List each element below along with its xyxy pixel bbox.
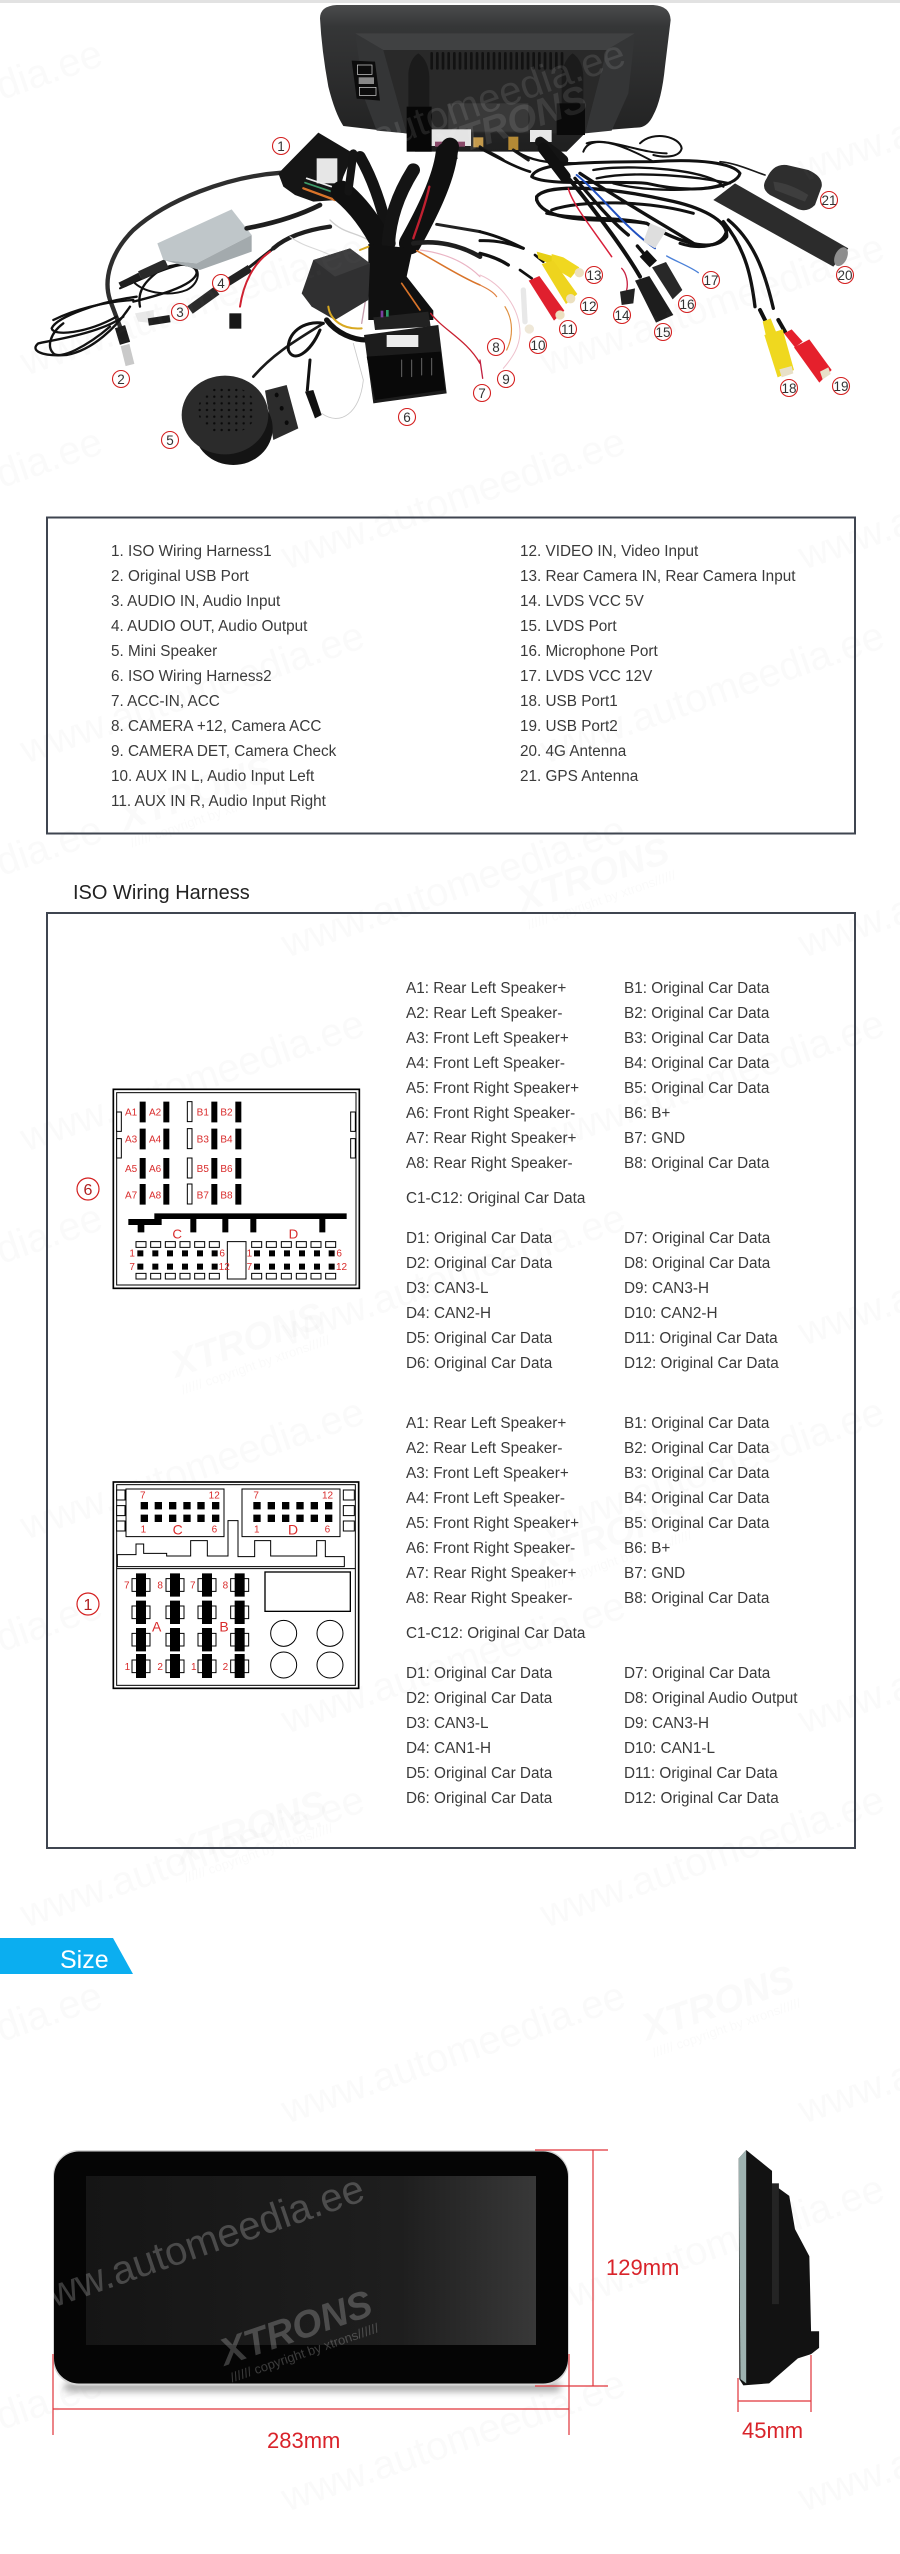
pinout list: harness 6: D9: CAN3-H [624,1280,709,1297]
callout 3: 3 [176,305,184,320]
parts list left column: 7. ACC-IN, ACC [111,693,220,710]
pinout list: harness 1: B1: Original Car Data [624,1415,770,1432]
parts list right column: 15. LVDS Port [520,618,617,635]
side view of head unit [739,2150,819,2385]
pinout list: harness 6: D10: CAN2-H [624,1305,718,1322]
parts list left column: 9. CAMERA DET, Camera Check [111,743,337,760]
watermark overlay on head unit: www.automeedia.ee [275,32,631,191]
connector diagram: harness 1: 1 [125,1662,131,1673]
pinout list: harness 6: B1: Original Car Data [624,980,770,997]
pinout list: harness 1: D8: Original Audio Output [624,1690,798,1707]
connector diagram: harness 1: 7 [190,1580,196,1591]
watermark: automeedia text pattern: www.automeedia.ee [14,1002,370,1161]
callout 9: 9 [502,372,510,387]
callout 19: 19 [833,379,849,394]
pinout list: harness 6: D8: Original Car Data [624,1255,771,1272]
pinout list: harness 6: D4: CAN2-H [406,1305,491,1322]
pinout list: harness 1: B6: B+ [624,1540,670,1557]
connector diagram: harness 6: A4 [149,1135,162,1146]
connector diagram: harness 1: 2 [223,1662,229,1673]
pinout list: harness 6: A7: Rear Right Speaker+ [406,1130,577,1147]
pinout list: harness 1: B2: Original Car Data [624,1440,770,1457]
watermark: automeedia text pattern: www.automeedia.ee [534,1390,890,1549]
interface box [157,205,320,270]
product photo: right side accessories [480,136,851,383]
watermark: XTRONS logos: XTRONS [509,830,675,922]
callout 11: 11 [561,322,575,337]
connector diagram: harness 6: B6 [220,1164,233,1175]
watermark: XTRONS logos: XTRONS [634,1958,800,2050]
pinout list: harness 1: A2: Rear Left Speaker- [406,1440,562,1457]
watermark: automeedia text pattern: www.automeedia.ee [534,226,890,385]
connector diagram: harness 1: 7 [140,1491,146,1502]
product photo: head unit rear [320,5,671,160]
connector diagram: harness 1: 6 [325,1524,331,1535]
pinout list: harness 1: A3: Front Left Speaker+ [406,1465,569,1482]
watermark: automeedia text pattern: www.automeedia.ee [14,1390,370,1549]
harness 2 connector [364,310,447,403]
watermark: XTRONS logos: XTRONS [525,1490,691,1582]
section banner: Size: Size [60,1946,109,1974]
pinout list: harness 1: D6: Original Car Data [406,1790,553,1807]
parts list right column: 16. Microphone Port [520,643,658,660]
watermark: XTRONS logos: XTRONS [112,748,278,840]
connector diagram: harness 1: B [219,1619,229,1635]
dimension: depth 45mm: 45mm [742,2418,803,2443]
heading: ISO Wiring Harness: ISO Wiring Harness [73,882,250,904]
watermark on screen: www.automeedia.ee [14,2167,370,2326]
parts list right column: 20. 4G Antenna [520,743,627,760]
pinout list: harness 6: B7: GND [624,1130,685,1147]
connector diagram: harness 6: A7 [125,1190,138,1201]
pinout list: harness 1: A8: Rear Right Speaker- [406,1590,573,1607]
watermark: automeedia text pattern: www.automeedia.ee [534,1002,890,1161]
connector diagram: harness 6: A5 [125,1164,138,1175]
pinout list: harness 6: D7: Original Car Data [624,1230,771,1247]
connector diagram: harness 1: 1 [191,1662,197,1673]
panel: parts list [47,518,855,834]
connector diagram: harness 6: B5 [197,1164,209,1175]
connector diagram: harness 1: 2 [157,1662,163,1673]
mini speaker [182,376,298,465]
callout 4 [212,274,230,292]
section banner: Size [0,1938,133,1974]
callout 6 badge: 6 [84,1182,93,1199]
connector diagram: harness 6 [113,1089,359,1288]
callout 5: 5 [166,433,174,448]
pinout list: harness 6: A5: Front Right Speaker+ [406,1080,579,1097]
pinout list: harness 6: D1: Original Car Data [406,1230,553,1247]
watermark: automeedia text pattern: www.automeedia.ee [275,1974,631,2133]
callout 17: 17 [703,273,719,288]
watermark on screen: XTRONS [212,2283,378,2375]
display area [86,2176,536,2345]
connector diagram: harness 6: C [172,1226,182,1241]
pinout list: harness 6: D12: Original Car Data [624,1355,779,1372]
pinout list: harness 1: D9: CAN3-H [624,1715,709,1732]
callout 2: 2 [117,372,125,387]
pinout list: harness 1: B7: GND [624,1565,685,1582]
pinout list: harness 1: A5: Front Right Speaker+ [406,1515,579,1532]
pinout list: harness 1: A6: Front Right Speaker- [406,1540,575,1557]
connector diagram: harness 6: A2 [149,1108,162,1119]
RCA leads and plugs [480,232,584,378]
cable loom coil [480,136,740,247]
watermark: XTRONS logos: ////// copyright by xtrons////// [182,1820,335,1885]
pinout list: harness 6: B5: Original Car Data [624,1080,770,1097]
parts list left column: 11. AUX IN R, Audio Input Right [111,793,327,810]
connector diagram: harness 6: D [289,1226,298,1241]
pinout list: harness 6: B4: Original Car Data [624,1055,770,1072]
watermark: automeedia text pattern: www.automeedia.ee [14,614,370,773]
pinout list: harness 6: B2: Original Car Data [624,1005,770,1022]
connector diagram: harness 6: 12 [219,1262,230,1273]
display connectors [432,129,471,146]
connector diagram: harness 1: D [288,1522,298,1538]
connector diagram: harness 1: 7 [253,1491,259,1502]
watermark: automeedia text pattern: www.automeedia.ee [14,1778,370,1937]
watermark: automeedia text pattern: www.automeedia.ee [14,226,370,385]
pinout list: harness 6: C1-C12: Original Car Data [406,1190,586,1207]
connector diagram: harness 6: A1 [125,1108,138,1119]
callout 6 badge [77,1178,99,1200]
wrapped wiring bundle [342,147,480,363]
watermark: automeedia text pattern: www.automeedia.ee [534,1778,890,1937]
parts list left column: 8. CAMERA +12, Camera ACC [111,718,321,735]
parts list left column: 1. ISO Wiring Harness1 [111,543,272,560]
connector diagram: harness 1: 12 [209,1491,220,1502]
connector diagram: harness 6: B1 [197,1108,209,1119]
watermark: XTRONS logos: ////// copyright by xtrons////// [128,785,281,850]
pinout list: harness 1: B5: Original Car Data [624,1515,770,1532]
pinout list: harness 6: B8: Original Car Data [624,1155,770,1172]
connector diagram: harness 1: 6 [212,1524,218,1535]
pinout list: harness 6: B3: Original Car Data [624,1030,770,1047]
pinout list: harness 6: A6: Front Right Speaker- [406,1105,575,1122]
pinout list: harness 6: B6: B+ [624,1105,670,1122]
watermark: automeedia text pattern: www.automeedia.ee [275,1584,631,1743]
watermark: XTRONS logos: ////// copyright by xtrons////// [541,1527,694,1592]
pinout list: harness 1: D10: CAN1-L [624,1740,715,1757]
pinout list: harness 1: B3: Original Car Data [624,1465,770,1482]
antenna 20 [713,183,851,268]
parts list right column: 14. LVDS VCC 5V [520,593,645,610]
pinout list: harness 1: D5: Original Car Data [406,1765,553,1782]
watermark on screen [53,2182,378,2382]
parts list left column: 2. Original USB Port [111,568,249,585]
USB cable and coil [35,173,282,365]
pinout list: harness 1: D2: Original Car Data [406,1690,553,1707]
watermark: XTRONS logos: ////// copyright by xtrons////// [179,1332,332,1397]
pinout list: harness 6: D11: Original Car Data [624,1330,778,1347]
pinout list: harness 1: D3: CAN3-L [406,1715,488,1732]
connector diagram: harness 6: 7 [247,1262,253,1273]
parts list left column: 5. Mini Speaker [111,643,217,660]
pinout list: harness 1: A4: Front Left Speaker- [406,1490,565,1507]
callout 14: 14 [614,308,630,323]
watermark: XTRONS logos: ////// copyright by xtrons////// [525,867,678,932]
watermark: XTRONS logos: ////// copyright by xtrons////// [650,1995,803,2060]
connector diagram: harness 6: A8 [149,1190,162,1201]
callout 7 [474,384,490,402]
callout 10: 10 [530,338,546,353]
callout 16: 16 [679,297,695,312]
parts list right column: 18. USB Port1 [520,693,618,710]
pinout list: harness 6 [406,980,779,1372]
pinout list: harness 1: D4: CAN1-H [406,1740,491,1757]
pinout list: harness 1: D11: Original Car Data [624,1765,778,1782]
speaker lead and plug [253,323,363,418]
pinout list: harness 1: A7: Rear Right Speaker+ [406,1565,577,1582]
pinout list: harness 6: D2: Original Car Data [406,1255,553,1272]
top grey strip [0,0,900,3]
slot label sticker [352,61,380,101]
parts list left column: 10. AUX IN L, Audio Input Left [111,768,315,785]
front view of head unit [14,2150,569,2391]
dimension: width 283mm: 283mm [267,2428,340,2453]
parts list right column: 21. GPS Antenna [520,768,639,785]
pinout list: harness 6: A1: Rear Left Speaker+ [406,980,566,997]
callout 21: 21 [821,193,837,208]
pinout list: harness 6: A2: Rear Left Speaker- [406,1005,562,1022]
pinout list: harness 1 [406,1415,798,1807]
callout 3 [172,304,188,320]
port leads 14 15 16 17 [568,173,698,323]
watermark on screen: ////// copyright by xtrons////// [228,2320,381,2385]
callout 2 [112,370,130,388]
connector diagram: harness 1: 8 [157,1580,163,1591]
callout 1 badge: 1 [84,1597,93,1614]
connector diagram: harness 1: 12 [322,1491,334,1502]
callout 8: 8 [492,340,500,355]
connector diagram: harness 6: 6 [219,1249,225,1260]
callout 13: 13 [586,268,602,283]
connector diagram: harness 6: B3 [197,1135,209,1146]
watermark: XTRONS logos: XTRONS [163,1295,329,1387]
callout 1: 1 [277,139,285,154]
watermark: XTRONS logos: XTRONS [166,1783,332,1875]
watermark: automeedia text pattern: www.automeedia.ee [534,2167,890,2326]
connector diagram: harness 1: 8 [223,1580,229,1591]
connector diagram: harness 6: 7 [129,1262,135,1273]
callout 1 [272,138,290,154]
connector diagram: harness 1: 1 [254,1524,260,1535]
connector diagram: harness 6: 1 [129,1249,135,1260]
audio jacks and tag [135,220,368,329]
dimension: height 129mm [535,2150,679,2386]
parts list right column: 19. USB Port2 [520,718,618,735]
callout 18: 18 [781,381,797,396]
dimension: depth 45mm [738,2355,811,2443]
watermark: automeedia text pattern: www.automeedia.ee [275,2362,631,2521]
callout 1 badge [77,1593,99,1615]
callout 20: 20 [837,268,853,283]
watermark: XTRONS logos [112,748,804,2061]
watermark: automeedia text pattern: www.automeedia.ee [275,1196,631,1355]
pinout list: harness 1: B4: Original Car Data [624,1490,770,1507]
connector diagram: harness 1 [113,1482,359,1688]
pinout list: harness 6: D5: Original Car Data [406,1330,553,1347]
product photo: left side accessories [35,133,480,465]
parts list left column: 3. AUDIO IN, Audio Input [111,593,281,610]
parts list right column: 12. VIDEO IN, Video Input [520,543,699,560]
pinout list: harness 6: D3: CAN3-L [406,1280,488,1297]
callout 7: 7 [478,386,486,401]
pinout list: harness 1: D7: Original Car Data [624,1665,771,1682]
pinout list: harness 1: D12: Original Car Data [624,1790,779,1807]
callout 8 [488,338,504,356]
pinout list: harness 1: C1-C12: Original Car Data [406,1625,586,1642]
callout 15: 15 [655,325,671,340]
callout 5 [162,432,178,448]
connector diagram: harness 6: B8 [220,1190,233,1201]
parts list left column: 4. AUDIO OUT, Audio Output [111,618,308,635]
connector diagram: harness 6: B4 [220,1135,233,1146]
vent slots [432,53,562,68]
parts list left column [111,543,337,810]
connector diagram: harness 6: A3 [125,1135,138,1146]
callout 6: 6 [403,410,411,425]
parts list right column: 13. Rear Camera IN, Rear Camera Input [520,568,796,585]
connector diagram: harness 6: B7 [197,1190,209,1201]
pinout list: harness 6: A4: Front Left Speaker- [406,1055,565,1072]
connector diagram: harness 6: 12 [336,1262,348,1273]
USB leads and plugs 18 19 [723,220,832,383]
callout 9 [498,370,514,388]
GPS antenna 21 [720,162,822,210]
connector diagram: harness 6: B2 [220,1108,233,1119]
parts list right column: 17. LVDS VCC 12V [520,668,653,685]
connector diagram: harness 1: A [152,1619,162,1635]
connector diagram: harness 6: 6 [336,1249,342,1260]
pinout list: harness 6: A8: Rear Right Speaker- [406,1155,573,1172]
harness 1 connector [278,133,353,202]
dimension: height 129mm: 129mm [606,2255,679,2280]
callout 6 [398,408,416,426]
pinout list: harness 6: D6: Original Car Data [406,1355,553,1372]
connector diagram: harness 6: A6 [149,1164,162,1175]
panel: ISO wiring harness [47,913,855,1848]
parts list right column [520,543,796,785]
callout 4: 4 [217,276,225,291]
pinout list: harness 1: B8: Original Car Data [624,1590,770,1607]
watermark overlay on head unit: XTRONS [427,78,593,170]
photo part number callouts [112,138,854,448]
connector diagram: harness 1: C [173,1522,183,1538]
relay box [302,247,370,340]
connector diagram: harness 6: 1 [247,1249,253,1260]
watermark: automeedia text pattern: www.automeedia.ee [534,614,890,773]
pinout list: harness 6: A3: Front Left Speaker+ [406,1030,569,1047]
connector diagram: harness 1: 7 [124,1580,130,1591]
dimension: width 283mm [53,2354,569,2453]
watermark: automeedia text pattern: www.automeedia.ee [275,420,631,579]
parts list left column: 6. ISO Wiring Harness2 [111,668,272,685]
pinout list: harness 1: D1: Original Car Data [406,1665,553,1682]
pinout list: harness 1: A1: Rear Left Speaker+ [406,1415,566,1432]
callout 12: 12 [581,299,597,314]
connector diagram: harness 1: 1 [141,1524,147,1535]
watermark: automeedia text pattern: www.automeedia.ee [275,808,631,967]
